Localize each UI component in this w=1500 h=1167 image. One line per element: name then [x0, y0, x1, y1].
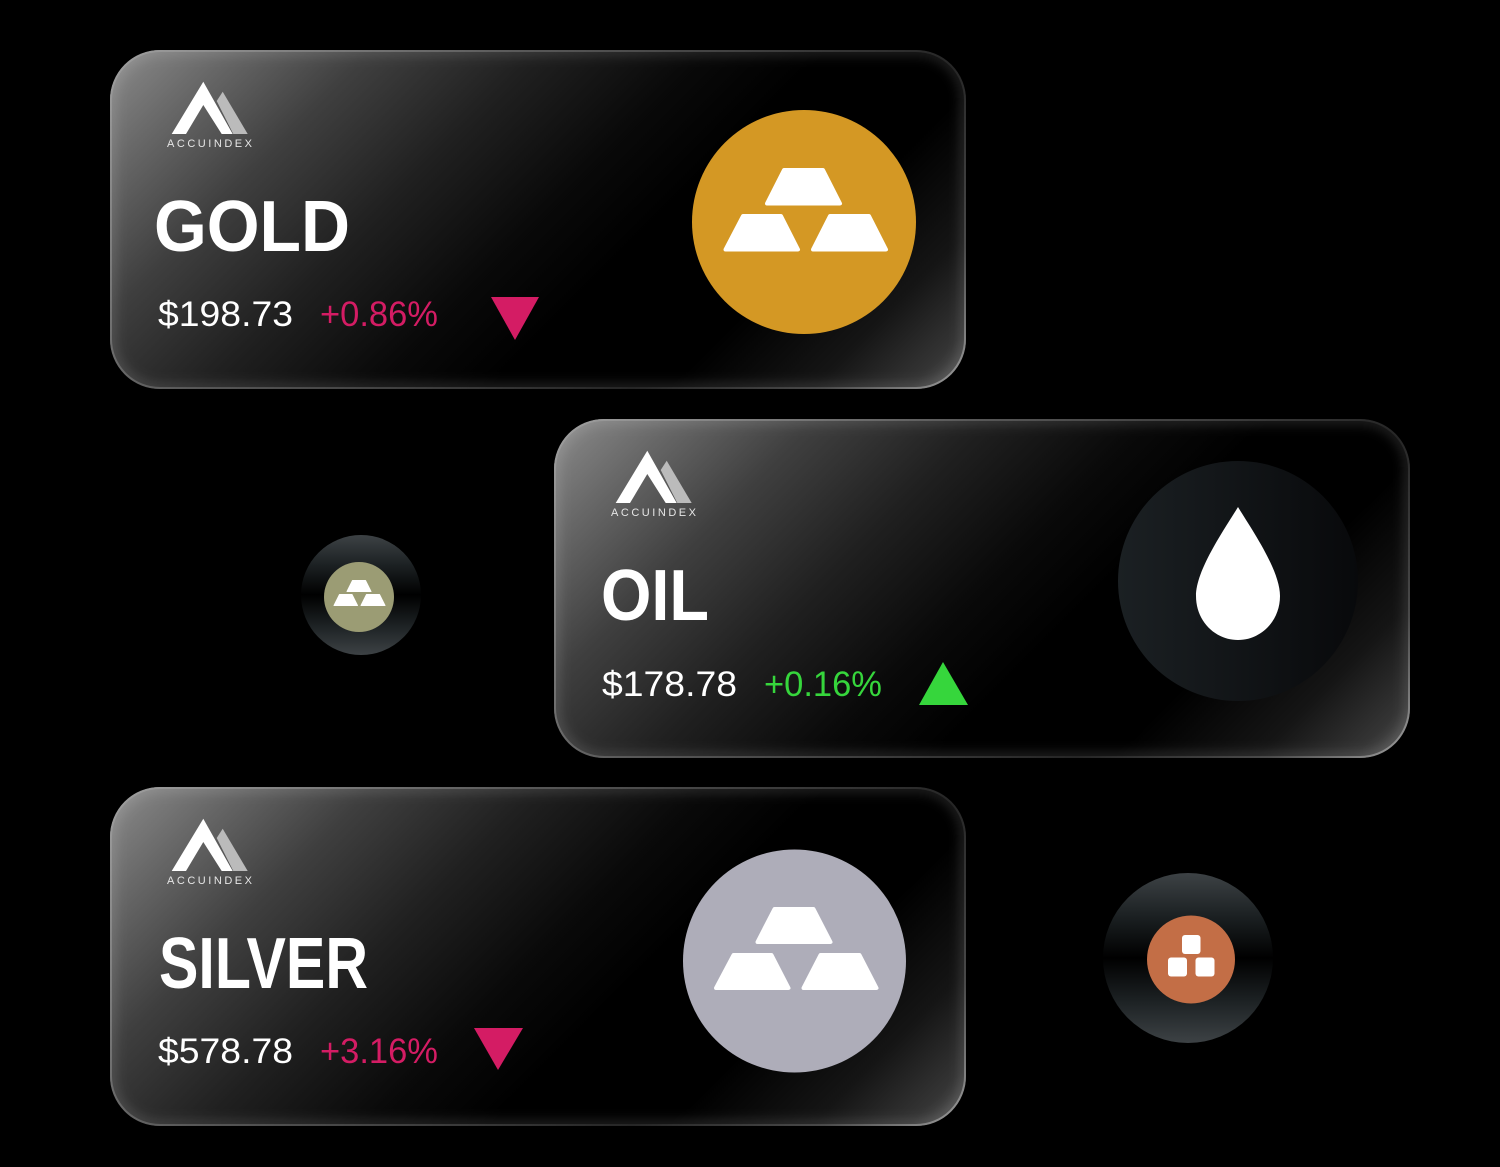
- icon: accuindex logo: [611, 451, 697, 519]
- icon: gold bars circle: [692, 110, 916, 334]
- icon: accuindex logo: ACCUINDEX: [167, 875, 253, 887]
- icon: small gold badge: [301, 535, 421, 655]
- icon: up arrow: [919, 662, 968, 705]
- percent change: +0.16%: [764, 665, 882, 704]
- panel: silver card: [110, 787, 966, 1126]
- card edge sheen: [554, 419, 1410, 758]
- icon: oil drop circle: [1118, 461, 1358, 701]
- icon: down arrow: [491, 297, 539, 340]
- heading: silver: SILVER: [159, 924, 368, 1004]
- card border: [111, 51, 965, 388]
- panel: gold card: [110, 50, 966, 389]
- price: $178.78: [602, 665, 737, 704]
- price: $198.73: [158, 295, 293, 334]
- card edge sheen: [110, 50, 966, 389]
- percent change: +0.86%: [320, 295, 438, 334]
- icon: accuindex logo: [167, 82, 253, 150]
- icon: down arrow: [474, 1028, 523, 1070]
- icon: accuindex logo: [167, 819, 253, 887]
- card background: [110, 50, 966, 389]
- icon: accuindex logo: ACCUINDEX: [167, 138, 253, 150]
- icon: silver bars circle: [683, 850, 906, 1072]
- price: $578.78: [158, 1032, 293, 1071]
- card background: [554, 419, 1410, 758]
- heading: gold: GOLD: [154, 187, 350, 267]
- card border: [111, 788, 965, 1125]
- percent change: +3.16%: [320, 1032, 438, 1071]
- heading: oil: OIL: [601, 556, 709, 636]
- icon: accuindex logo: ACCUINDEX: [611, 507, 697, 519]
- card edge sheen: [110, 787, 966, 1126]
- icon: copper blocks badge: [1103, 873, 1273, 1043]
- card border: [555, 420, 1409, 757]
- card background: [110, 787, 966, 1126]
- panel: oil card: [554, 419, 1410, 758]
